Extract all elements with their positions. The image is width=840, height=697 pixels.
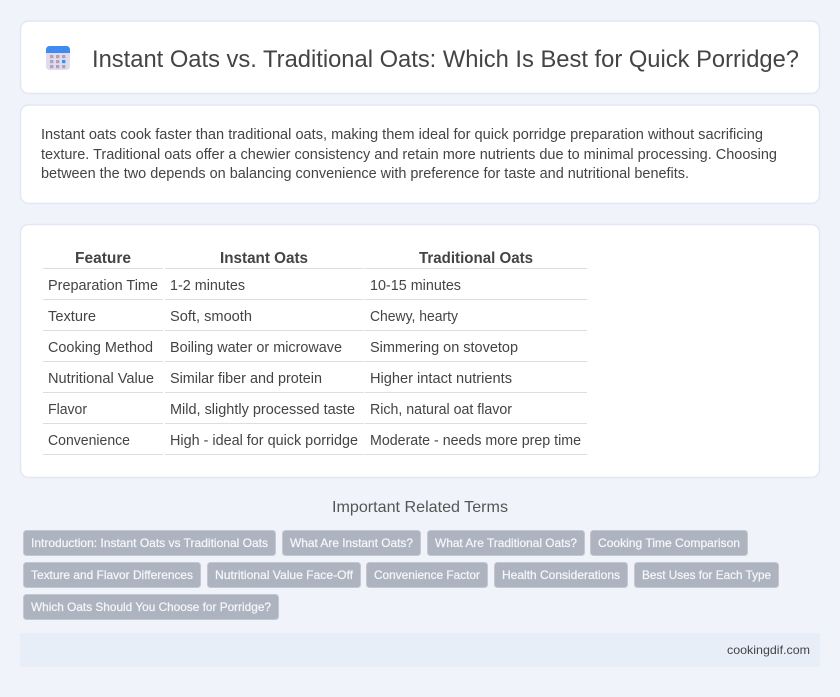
table header row: Instant Oats <box>220 250 308 267</box>
footer <box>20 633 820 667</box>
tag <box>634 562 778 588</box>
table row: preparation time: 10-15 minutes <box>370 278 461 294</box>
tag <box>428 530 584 556</box>
tag: Cooking Time Comparison <box>598 536 740 550</box>
title: Instant Oats vs. Traditional Oats: Which Is Best for Quick Porridge? <box>92 46 799 73</box>
table row: texture <box>43 309 587 331</box>
panel: introduction <box>20 105 820 204</box>
heading: important related terms: Important Related Terms <box>332 499 508 516</box>
tag list <box>24 530 778 620</box>
table row: preparation time: Preparation Time <box>48 278 158 294</box>
icon: calendar <box>46 46 70 70</box>
table header row: Traditional Oats <box>419 250 533 267</box>
table header row: Feature <box>75 250 131 267</box>
table row: texture: Soft, smooth <box>170 309 252 325</box>
text block: introduction: texture. Traditional oats offer a chewier consistency and retain more nutrients due to minimal processing. Choosing <box>41 147 777 163</box>
footer: cookingdif.com <box>727 643 810 657</box>
table row: convenience: Convenience <box>48 433 130 449</box>
table header row <box>43 250 587 269</box>
table row: nutritional value: Nutritional Value <box>48 371 154 387</box>
tag: Texture and Flavor Differences <box>31 568 193 582</box>
table row: texture: Texture <box>48 309 96 325</box>
tag <box>494 562 628 588</box>
table row: cooking method <box>43 340 587 362</box>
tag <box>208 562 360 588</box>
tag: Health Considerations <box>502 568 620 582</box>
table row: convenience: Moderate - needs more prep time <box>370 433 581 449</box>
header panel <box>20 21 820 94</box>
table row: convenience <box>43 433 587 455</box>
tag <box>366 562 488 588</box>
tag: What Are Instant Oats? <box>290 536 413 550</box>
table row: convenience: High - ideal for quick porridge <box>170 433 358 449</box>
tag: Which Oats Should You Choose for Porridge? <box>31 600 271 614</box>
tag: Convenience Factor <box>374 568 480 582</box>
tag: Introduction: Instant Oats vs Traditional Oats <box>31 536 268 550</box>
table row: cooking method: Boiling water or microwave <box>170 340 342 356</box>
table row: nutritional value: Similar fiber and protein <box>170 371 322 387</box>
tag <box>24 562 200 588</box>
text block: introduction <box>41 127 777 182</box>
table row: flavor <box>43 402 587 424</box>
table row: nutritional value <box>43 371 587 393</box>
table row: nutritional value: Higher intact nutrients <box>370 371 512 387</box>
table row: texture: Chewy, hearty <box>370 309 459 325</box>
text block: introduction: Instant oats cook faster than traditional oats, making them ideal for quick porridge preparation without sacrificing <box>41 127 763 143</box>
table row: preparation time: 1-2 minutes <box>170 278 245 294</box>
tag: Nutritional Value Face-Off <box>215 568 354 582</box>
table row: cooking method: Simmering on stovetop <box>370 340 518 356</box>
table row: flavor: Mild, slightly processed taste <box>170 402 355 418</box>
tag <box>282 530 420 556</box>
table row: flavor: Flavor <box>48 402 87 418</box>
table row: preparation time <box>43 278 587 300</box>
table row: flavor: Rich, natural oat flavor <box>370 402 512 418</box>
text block: introduction: between the two depends on balancing convenience with preference for taste and nutritional benefits. <box>41 166 689 182</box>
tag: What Are Traditional Oats? <box>435 536 577 550</box>
tag <box>24 594 278 620</box>
tag: Best Uses for Each Type <box>642 568 771 582</box>
table row: cooking method: Cooking Method <box>48 340 153 356</box>
tag <box>590 530 748 556</box>
tag <box>24 530 276 556</box>
panel: comparison table <box>20 224 820 478</box>
